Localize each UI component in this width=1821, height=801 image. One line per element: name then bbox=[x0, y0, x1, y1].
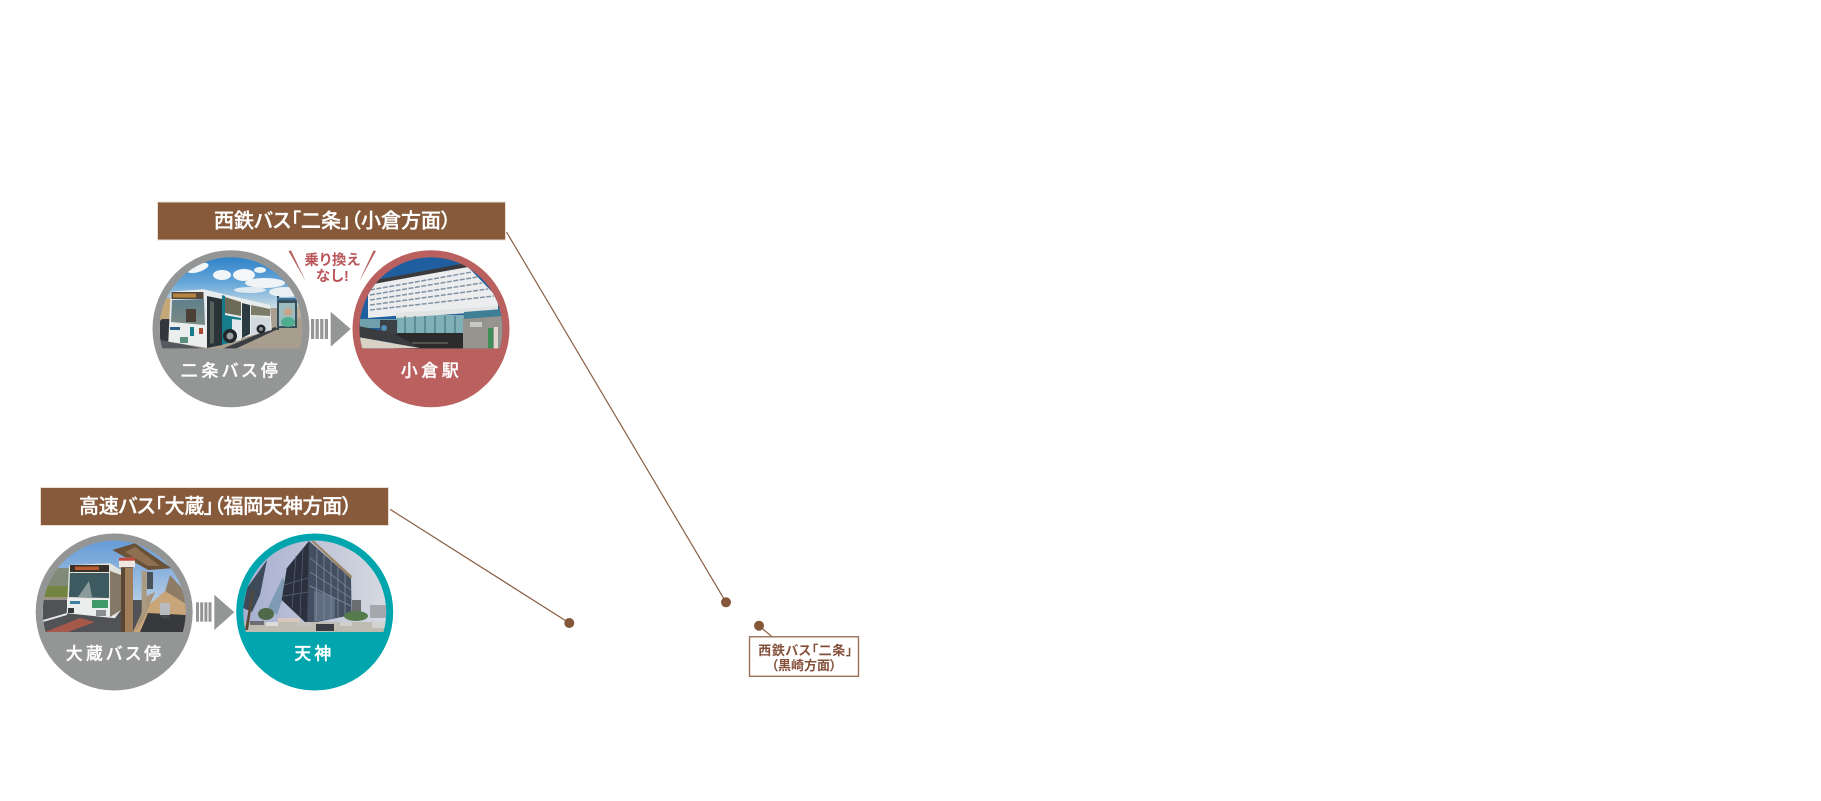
circle: Kokura station bbox=[350, 250, 520, 407]
arrow: Okura to Tenjin bbox=[196, 595, 234, 630]
leader line: Okura to map point bbox=[390, 509, 574, 628]
heading bar: Expressway bus Okura bbox=[40, 488, 388, 526]
photo: bus at Nijo stop bbox=[160, 257, 302, 348]
circle: Tenjin bbox=[235, 534, 405, 690]
photo: bus at Okura stop bbox=[42, 540, 186, 632]
photo: Tenjin office building bbox=[243, 540, 386, 632]
route 2: Expressway bus Okura to Tenjin bbox=[35, 488, 574, 690]
heading bar: Nishitetsu bus Nijo bbox=[158, 202, 506, 240]
photo: Kokura station building bbox=[360, 257, 502, 348]
label: Nijo bus stop: 二条バス停 bbox=[181, 362, 278, 381]
callout: no transfer: なし! bbox=[316, 268, 349, 285]
map marker callout: Nishitetsu bus Nijo toward Kurosaki: （黒崎方面） bbox=[771, 658, 837, 673]
leader line: Nijo to map point bbox=[506, 232, 731, 607]
route 1: Nishitetsu bus Nijo to Kokura bbox=[150, 202, 731, 607]
heading bar: Expressway bus Okura: 高速バス「大蔵」（福岡天神方面） bbox=[79, 495, 352, 518]
map marker callout: Nishitetsu bus Nijo toward Kurosaki bbox=[750, 621, 858, 676]
label: Kokura station: 小倉駅 bbox=[401, 362, 459, 381]
circle: Okura bus stop bbox=[35, 534, 205, 690]
circle: Nijo bus stop bbox=[150, 250, 320, 407]
label: Okura bus stop: 大蔵バス停 bbox=[66, 644, 161, 664]
arrow: Nijo to Kokura bbox=[311, 312, 351, 347]
heading bar: Nishitetsu bus Nijo: 西鉄バス「二条」（小倉方面） bbox=[214, 210, 451, 232]
callout: no transfer: 乗り換え bbox=[304, 251, 361, 269]
map marker callout: Nishitetsu bus Nijo toward Kurosaki: 西鉄バス「二条」 bbox=[758, 643, 852, 658]
label: Tenjin: 天神 bbox=[294, 644, 331, 664]
callout: no transfer bbox=[288, 250, 376, 285]
